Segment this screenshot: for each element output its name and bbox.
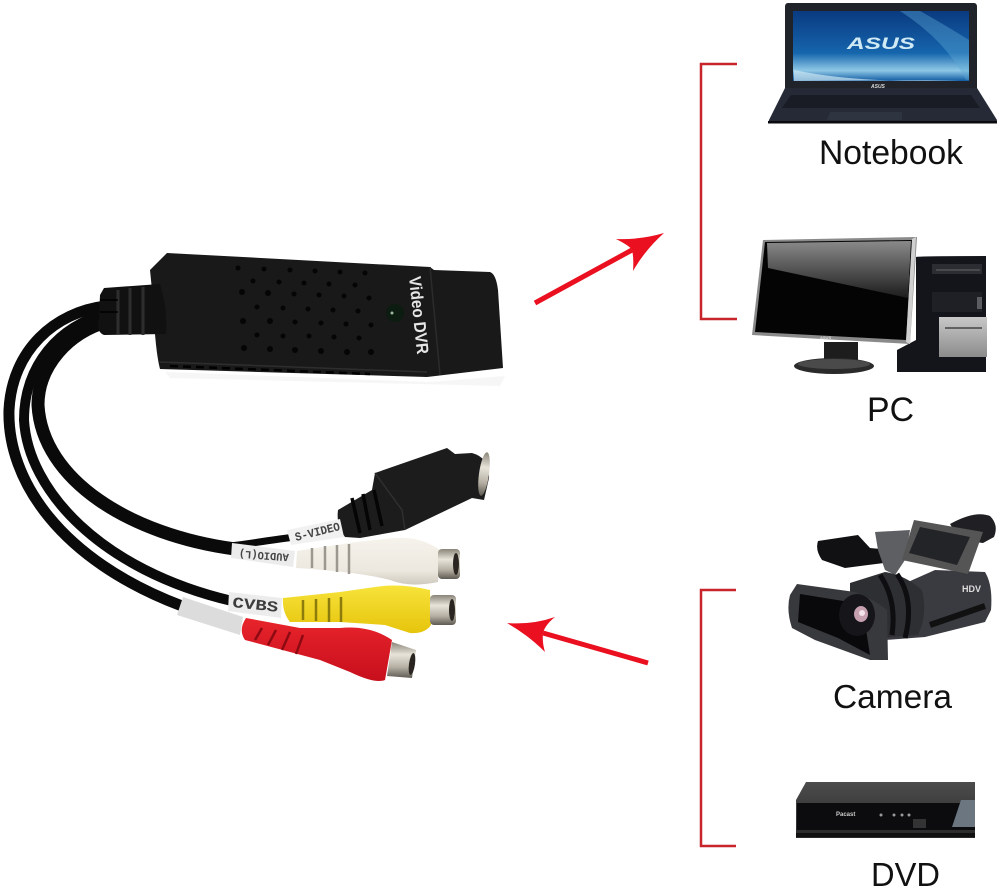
CVBS label [228, 592, 282, 618]
strain relief [98, 284, 166, 335]
vent holes [236, 266, 374, 355]
dongle body [150, 253, 503, 377]
label: PC: PC [867, 391, 914, 429]
AUDIO(L) label: AUDIO(L) [239, 547, 289, 562]
S-Video connector [338, 448, 492, 538]
icon: PC [752, 237, 987, 374]
USB capture dongle [98, 253, 505, 386]
icon: DVD player [796, 782, 975, 838]
product label: Video DVR [405, 275, 432, 355]
label: Notebook: Notebook [819, 134, 964, 172]
white cable to red plug [177, 597, 243, 635]
icon: camera: HDV [962, 584, 981, 594]
yellow RCA connector [283, 586, 456, 633]
eyepiece [950, 514, 996, 543]
S-VIDEO label: S-VIDEO [294, 520, 342, 545]
bracket: outputs [701, 64, 737, 319]
AUDIO(L) label [231, 543, 295, 567]
monitor [752, 237, 917, 374]
dongle shadow [165, 372, 505, 386]
viewfinder [817, 535, 892, 568]
cables [9, 306, 295, 606]
label: DVD: DVD [871, 856, 940, 893]
icon: notebook [768, 3, 997, 124]
icon: notebook: ASUS [846, 34, 916, 53]
lens hood [788, 584, 888, 660]
CVBS label: CVBS [231, 595, 279, 617]
arrow: from sources [507, 617, 648, 663]
LCD screen [902, 520, 983, 574]
red RCA connector [242, 618, 417, 681]
icon: notebook: ASUS [870, 84, 886, 90]
bracket: inputs [701, 590, 736, 846]
icon: DVD player: Pacast [836, 812, 855, 818]
tower [897, 256, 987, 372]
label: Camera: Camera [833, 678, 953, 715]
lens barrel [850, 572, 924, 640]
icon: camera [788, 514, 996, 660]
white RCA connector [296, 538, 460, 585]
metal tip [476, 452, 492, 496]
monitor: ASUS [820, 335, 831, 340]
status LED [386, 304, 404, 322]
arrow: to computer [535, 233, 664, 303]
camera body [885, 570, 991, 640]
